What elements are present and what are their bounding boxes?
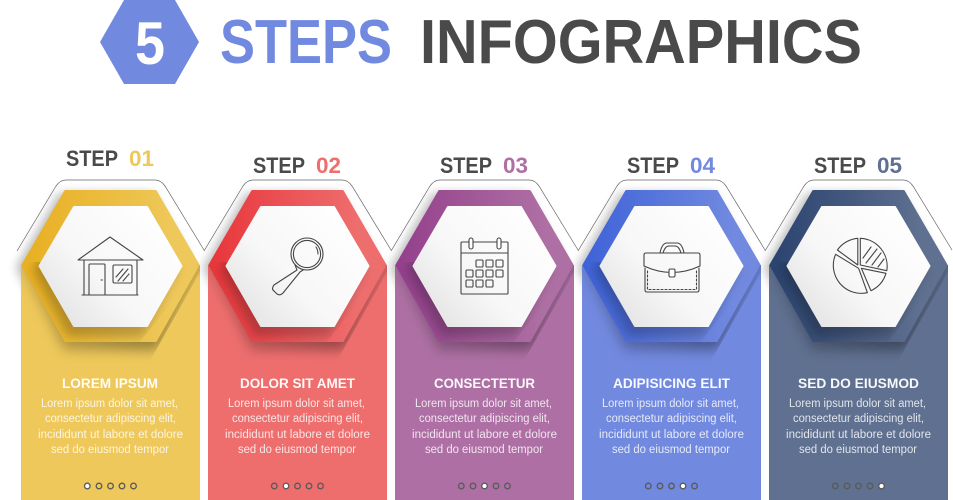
text block: sed do eiusmod tempor: [425, 444, 543, 456]
step label 03: [440, 153, 528, 178]
step label 05: [814, 153, 902, 178]
text block: consectetur adipiscing elit,: [419, 413, 550, 425]
badge: 5 hexagon: 5: [135, 10, 165, 77]
icon: calendar: [461, 238, 508, 294]
colored hexagon: [771, 192, 946, 340]
step label 03: STEP: [440, 153, 492, 178]
text block: Lorem ipsum dolor sit amet,: [415, 398, 552, 410]
column body: [582, 265, 761, 500]
icon: magnifier: [272, 238, 323, 295]
text block: [412, 398, 557, 456]
left cast shadow: [760, 188, 918, 288]
text block: sed do eiusmod tempor: [51, 444, 169, 456]
text block: Lorem ipsum dolor sit amet,: [41, 398, 178, 410]
inner shadow: [30, 262, 180, 342]
text block: [225, 398, 370, 456]
column body: [208, 265, 387, 500]
colored hexagon: [584, 192, 759, 340]
colored hexagon: [23, 192, 198, 340]
panel: step 04: [577, 153, 765, 500]
heading: CONSECTETUR: [434, 375, 535, 391]
pagination dots: [458, 483, 510, 489]
text block: incididunt ut labore et dolore: [786, 429, 931, 441]
left cast shadow: [12, 188, 170, 288]
panel: step 01: [16, 146, 204, 500]
hexagon outline: [17, 180, 204, 251]
text block: consectetur adipiscing elit,: [45, 413, 176, 425]
pagination dots: [832, 483, 884, 489]
step label 02: [253, 153, 341, 178]
pagination dots: [646, 483, 697, 489]
hexagon outline: [204, 180, 391, 251]
icon: pie chart: [833, 238, 887, 293]
step label 01: [66, 146, 154, 171]
white hexagon: [40, 207, 182, 326]
long shadow: [582, 265, 761, 358]
step label 02: STEP: [253, 153, 305, 178]
white hexagon: [414, 207, 556, 326]
white hexagon: [788, 207, 930, 326]
heading: SED DO EIUSMOD: [798, 375, 919, 391]
title word: infographics: INFOGRAPHICS: [420, 8, 862, 77]
icon: house: [78, 237, 143, 295]
panel: step 03: [390, 153, 578, 500]
left cast shadow: [200, 188, 357, 288]
text block: incididunt ut labore et dolore: [599, 429, 744, 441]
heading: LOREM IPSUM: [62, 375, 158, 391]
panel: step 02: [203, 153, 391, 500]
hexagon outline: [765, 180, 952, 251]
panel: step 05: [764, 153, 952, 500]
step label 05: 05: [877, 153, 902, 178]
text block: consectetur adipiscing elit,: [232, 413, 363, 425]
long shadow: [769, 265, 948, 356]
icon: briefcase: [644, 243, 700, 292]
step label 04: [627, 153, 715, 178]
inner shadow: [780, 262, 926, 340]
step label 05: STEP: [814, 153, 866, 178]
white hexagon: [600, 207, 742, 326]
inner shadow: [406, 262, 554, 340]
text block: Lorem ipsum dolor sit amet,: [789, 398, 926, 410]
text block: incididunt ut labore et dolore: [225, 429, 370, 441]
long shadow: [208, 265, 387, 358]
hexagon outline: [391, 180, 578, 251]
text block: [786, 398, 931, 456]
step label 01: 01: [129, 146, 154, 171]
step label 03: 03: [503, 153, 528, 178]
text block: incididunt ut labore et dolore: [38, 429, 183, 441]
text block: Lorem ipsum dolor sit amet,: [602, 398, 739, 410]
text block: [38, 398, 183, 456]
text block: Lorem ipsum dolor sit amet,: [228, 398, 365, 410]
text block: consectetur adipiscing elit,: [606, 413, 737, 425]
heading: ADIPISICING ELIT: [613, 375, 730, 391]
inner shadow: [591, 262, 742, 342]
colored hexagon: [210, 192, 385, 340]
pagination dots: [272, 483, 323, 489]
text block: sed do eiusmod tempor: [799, 444, 917, 456]
text block: [599, 398, 744, 456]
left cast shadow: [386, 188, 542, 288]
text block: sed do eiusmod tempor: [238, 444, 356, 456]
left cast shadow: [574, 188, 729, 288]
text block: consectetur adipiscing elit,: [793, 413, 924, 425]
title word: steps: STEPS: [220, 8, 392, 77]
column body: [395, 265, 574, 500]
step label 02: 02: [316, 153, 341, 178]
heading: DOLOR SIT AMET: [240, 375, 355, 391]
text block: incididunt ut labore et dolore: [412, 429, 557, 441]
step label 04: STEP: [627, 153, 679, 178]
long shadow: [21, 265, 200, 358]
title: [100, 0, 862, 84]
column body: [21, 265, 200, 500]
badge: 5 hexagon: [100, 0, 199, 84]
column body: [769, 265, 948, 500]
step label 01: STEP: [66, 146, 118, 171]
text block: sed do eiusmod tempor: [612, 444, 730, 456]
colored hexagon: [397, 192, 572, 340]
hexagon outline: [578, 180, 765, 251]
inner shadow: [217, 262, 368, 342]
pagination dots: [84, 483, 136, 489]
step label 04: 04: [690, 153, 715, 178]
long shadow: [395, 265, 574, 356]
white hexagon: [226, 207, 368, 326]
